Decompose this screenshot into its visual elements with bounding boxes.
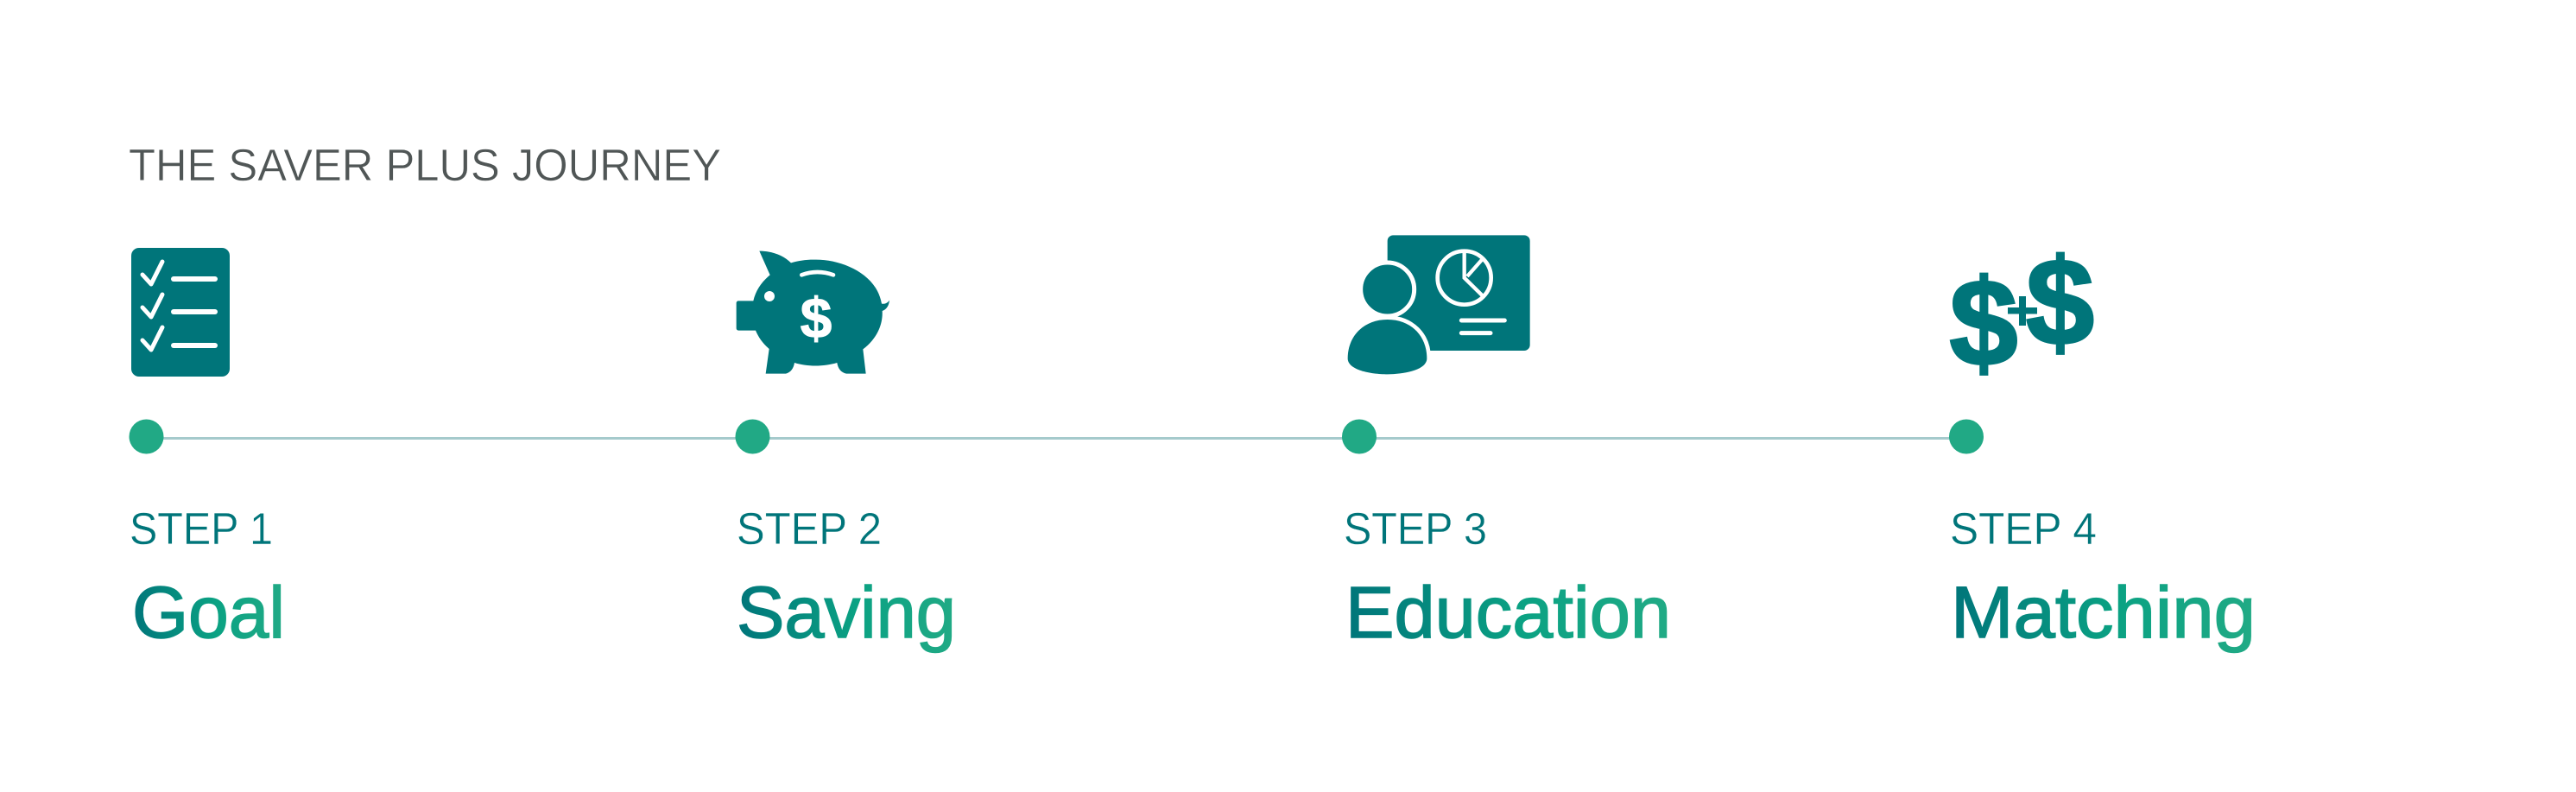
icon: piggy bank: $ <box>801 286 832 350</box>
icon: checklist <box>131 248 230 377</box>
timeline <box>130 420 1984 454</box>
step 4 label: STEP 4 <box>1950 504 2097 554</box>
icon: piggy bank <box>737 251 889 374</box>
step 1 name: Goal <box>132 572 285 653</box>
step 3 label: STEP 3 <box>1344 504 1487 554</box>
icon: dollar plus dollar: $ <box>2026 234 2094 371</box>
step 2 name: Saving <box>737 572 956 653</box>
step 1 label: STEP 1 <box>130 504 273 554</box>
icon: dollar plus dollar: $ <box>1949 255 2018 392</box>
icon: dollar plus dollar <box>1949 234 2094 392</box>
step 4 name: Matching <box>1951 572 2256 653</box>
icon: presenter with chart board <box>1348 235 1530 374</box>
step 3 name: Education <box>1345 572 1671 653</box>
step 2 label: STEP 2 <box>737 504 882 554</box>
title: THE SAVER PLUS JOURNEY <box>129 141 721 191</box>
